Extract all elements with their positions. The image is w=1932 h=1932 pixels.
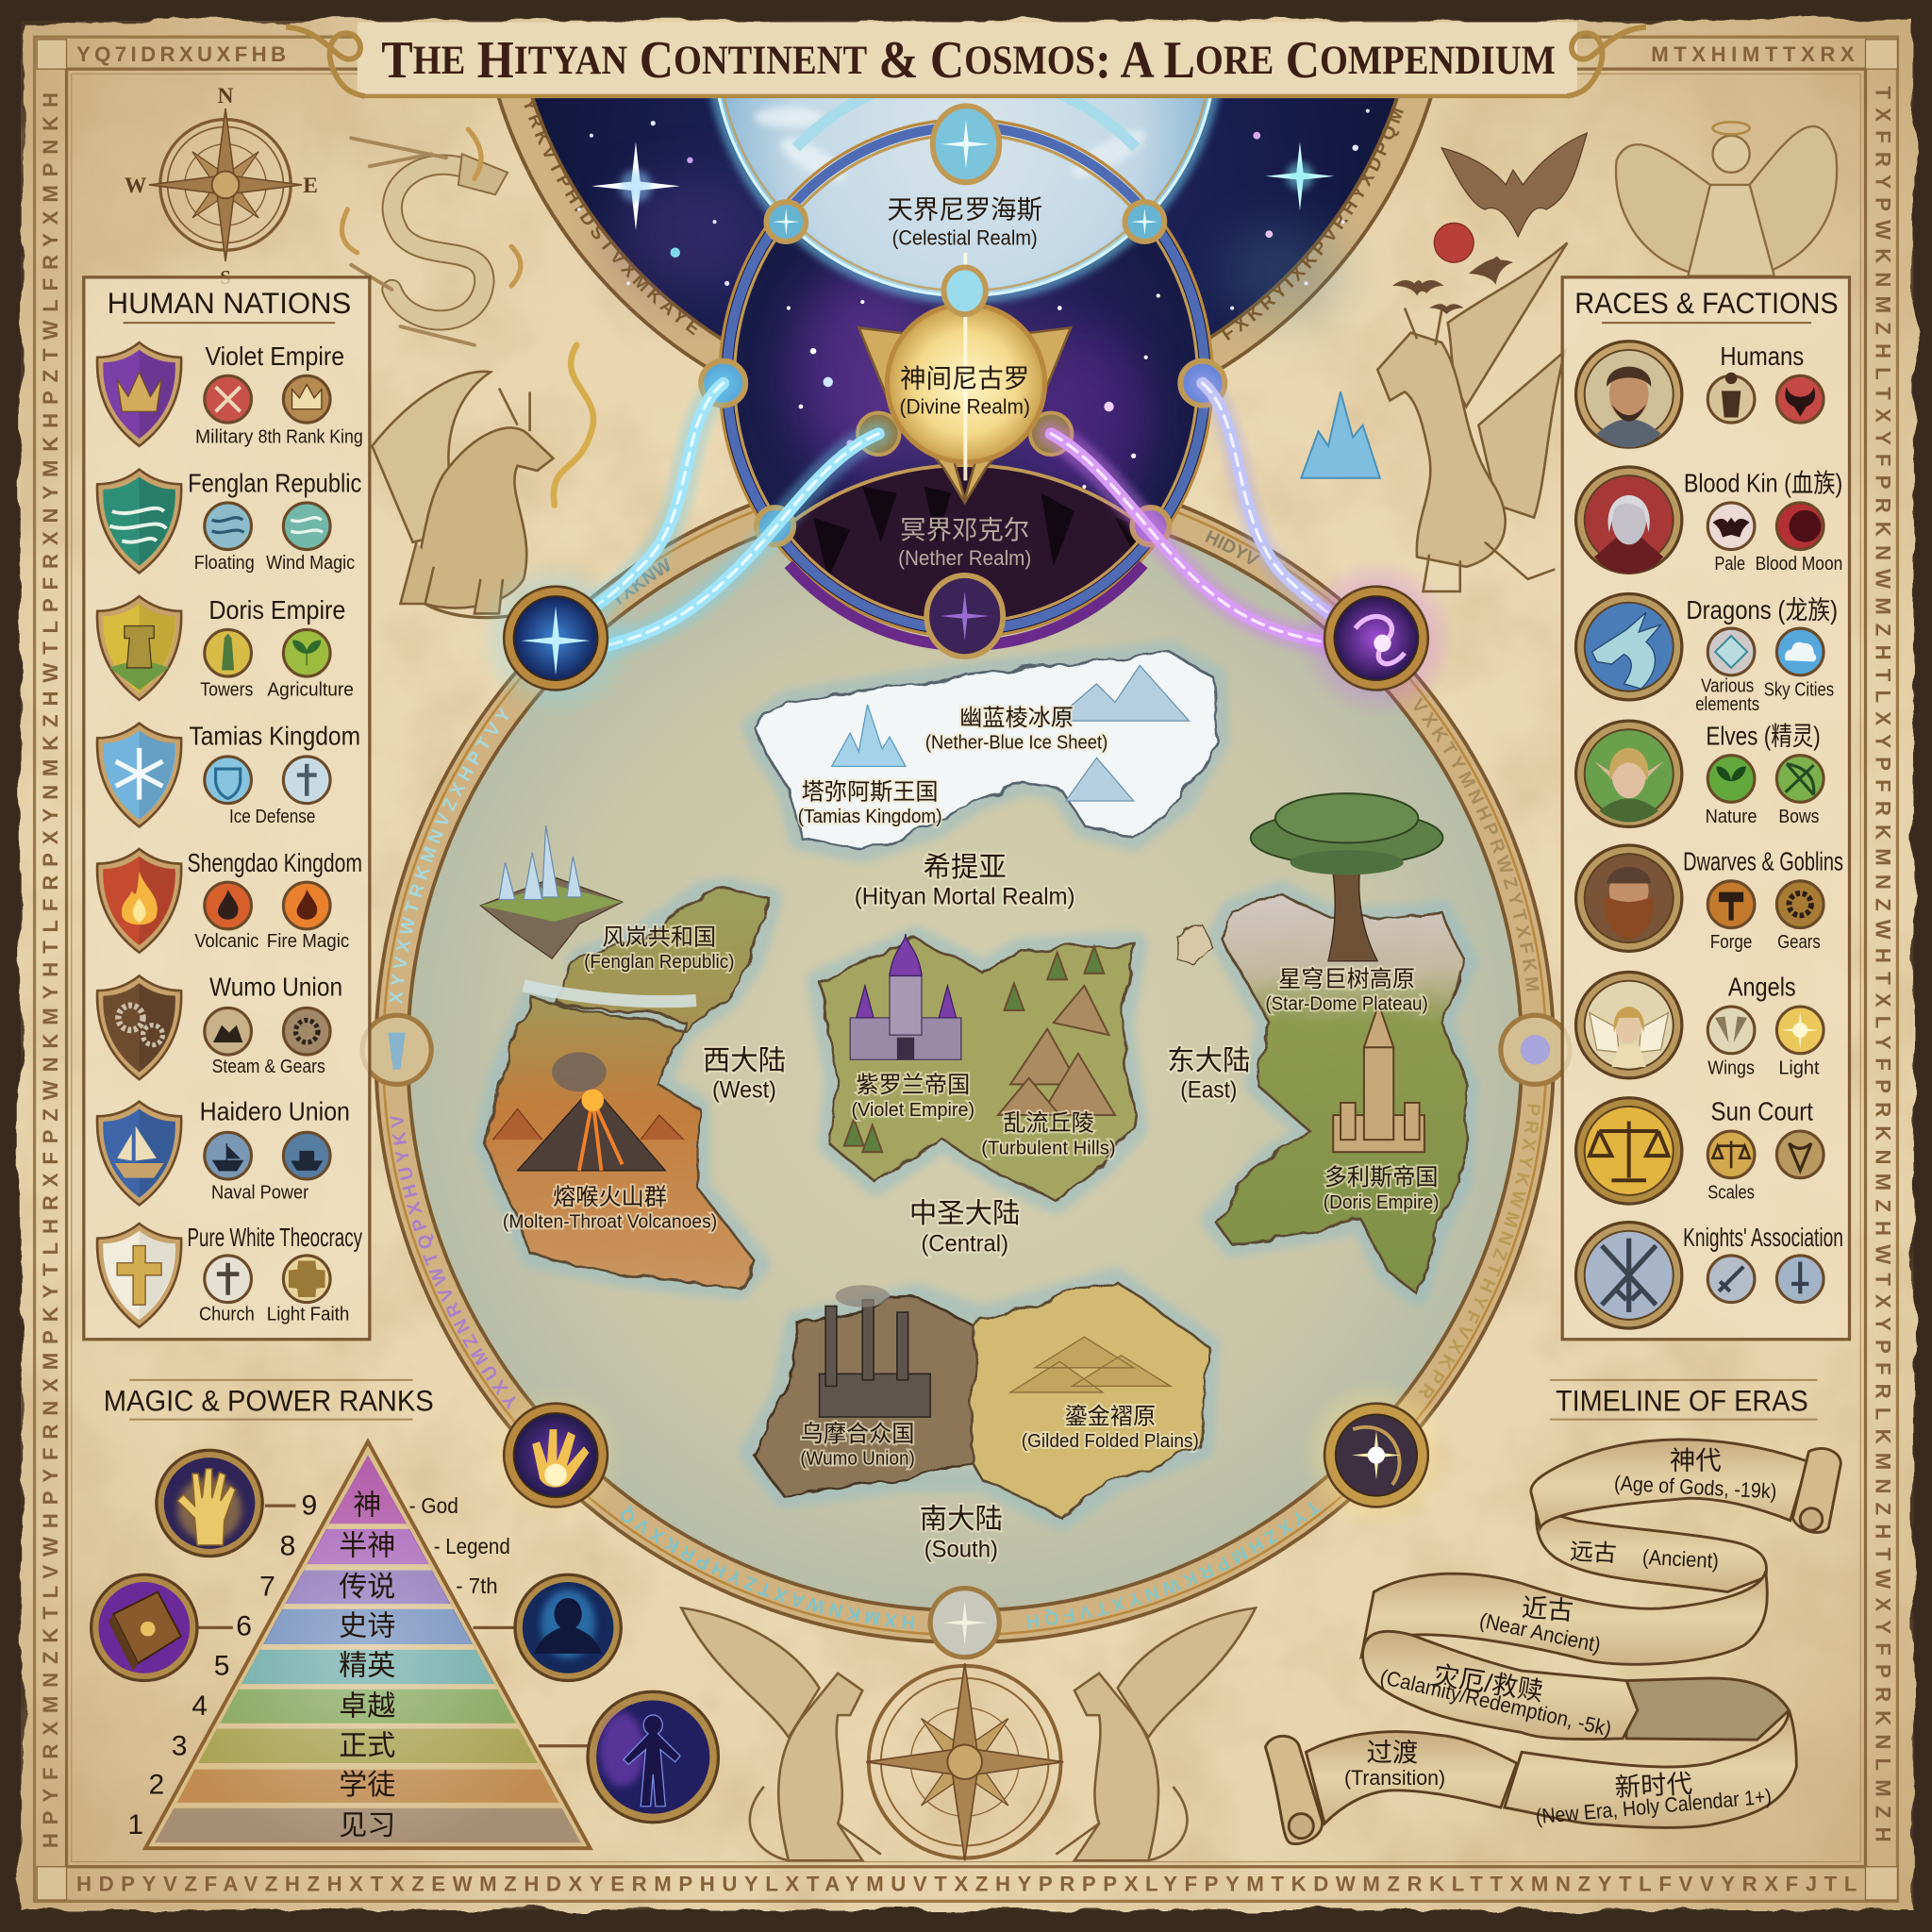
rank numbers and side notes: 4 xyxy=(192,1690,208,1722)
oval gold and blue ring xyxy=(720,74,1212,645)
nation: shengdao kingdom xyxy=(97,848,362,953)
timeline era labels: 新时代 xyxy=(1614,1769,1693,1802)
realm labels xyxy=(887,195,1042,570)
map labels: (Violet Empire) xyxy=(852,1100,974,1121)
race: sun court xyxy=(1576,1097,1824,1204)
panel: human nations xyxy=(84,277,370,1340)
outer rune border frame: YQ7IDRXUXFHB xyxy=(76,42,286,66)
main mortal realm circle with rune ring: VXKTYMNHPRWZYTXFKM xyxy=(1413,697,1540,991)
orb: flaming hand lower left xyxy=(484,1384,627,1526)
heading: timeline of eras: TIMELINE OF ERAS xyxy=(1556,1385,1808,1418)
compass rose top-left: E xyxy=(303,174,318,198)
nation: doris empire: Agriculture xyxy=(267,679,354,700)
timeline era labels: (New Era, Holy Calendar 1+) xyxy=(1535,1784,1773,1828)
rank numbers and side notes xyxy=(127,1491,589,1840)
race: blood kin: Blood Kin (血族) xyxy=(1684,468,1842,498)
cosmos disc with rune ring xyxy=(496,98,1432,370)
nation: shengdao kingdom: Fire Magic xyxy=(267,931,349,952)
cosmos disc with rune ring: FXKRYIXKPVRHYXDPQM xyxy=(1223,107,1404,341)
rank numbers and side notes: - 7th xyxy=(456,1574,498,1598)
medallion: divine hand xyxy=(157,1450,262,1557)
race: blood kin: Blood Moon xyxy=(1756,554,1842,575)
rank numbers and side notes: 2 xyxy=(149,1770,164,1801)
continent: northern ice sheet xyxy=(754,653,1217,850)
continent: eastern lands xyxy=(1176,893,1466,1293)
nether realm basin xyxy=(791,464,1140,621)
ring junction medallions xyxy=(701,106,1224,657)
orb: golden burst lower right xyxy=(1300,1379,1453,1532)
continent: central lands xyxy=(820,939,1135,1201)
map labels: 紫罗兰帝国 xyxy=(856,1073,970,1098)
timeline era labels: (Age of Gods, -19k) xyxy=(1613,1471,1777,1503)
nation: fenglan republic: Wind Magic xyxy=(266,553,355,574)
rank numbers and side notes: 7 xyxy=(259,1571,275,1602)
winged dragon sketch right xyxy=(1377,242,1567,591)
rune ring medallion south xyxy=(930,1589,999,1657)
rune ring medallion east xyxy=(1501,1015,1570,1084)
map labels: 西大陆 xyxy=(703,1045,786,1076)
heading: magic and power ranks: MAGIC & POWER RANKS xyxy=(104,1385,434,1418)
race: blood kin xyxy=(1576,467,1842,575)
medallion: arcane tome xyxy=(92,1574,197,1681)
race: dragons: Dragons (龙族) xyxy=(1686,595,1838,625)
race: dwarves and goblins xyxy=(1576,845,1843,953)
map labels: 鎏金褶原 xyxy=(1064,1405,1156,1430)
race: elves: Elves (精灵) xyxy=(1706,721,1821,750)
map labels: (Central) xyxy=(921,1232,1008,1257)
magic rank pyramid: 卓越 xyxy=(339,1690,395,1722)
nation: wumo union: Wumo Union xyxy=(209,973,342,1002)
race: elves xyxy=(1576,721,1824,827)
golden flame wisp xyxy=(554,345,593,506)
red moon with bats xyxy=(1392,223,1513,314)
bottom compass rose xyxy=(866,1663,1063,1860)
map labels: (Wumo Union) xyxy=(800,1448,915,1469)
nation: doris empire xyxy=(97,595,354,700)
realm labels: (Celestial Realm) xyxy=(892,226,1038,250)
race: angels xyxy=(1576,973,1824,1078)
map labels: 星穹巨树高原 xyxy=(1278,967,1415,992)
realm labels: 神间尼古罗 xyxy=(900,363,1029,392)
energy stream: violet links xyxy=(1051,383,1349,643)
nation: wumo union: Steam & Gears xyxy=(212,1057,325,1077)
nation: fenglan republic xyxy=(97,468,361,574)
angel sketch xyxy=(1616,122,1837,276)
nation: pure white theocracy: Church xyxy=(199,1305,255,1325)
nation: fenglan republic: Floating xyxy=(194,553,255,574)
continent: wumo union xyxy=(752,1296,975,1496)
cosmic rings enclosing the three realms xyxy=(722,230,1210,633)
timeline era labels: (Near Ancient) xyxy=(1477,1608,1603,1657)
wumo factory xyxy=(820,1285,930,1417)
map labels: (South) xyxy=(924,1538,998,1563)
compass rose top-left: S xyxy=(220,266,231,289)
map labels xyxy=(503,706,1440,1563)
winged dragon sketch left xyxy=(372,372,553,618)
energy stream: cyan links xyxy=(576,383,878,647)
rank numbers and side notes: 9 xyxy=(301,1491,317,1522)
magic rank pyramid: 半神 xyxy=(339,1531,395,1562)
floating crystal island xyxy=(480,825,623,958)
realm labels: 天界尼罗海斯 xyxy=(887,195,1042,225)
race: humans: Humans xyxy=(1720,341,1804,371)
timeline era labels: 灾厄/救赎 xyxy=(1431,1660,1545,1707)
map labels: 风岚共和国 xyxy=(602,924,716,950)
medallion: awakened blue figure xyxy=(515,1574,621,1681)
map labels: 多利斯帝国 xyxy=(1324,1165,1439,1191)
timeline era labels: 神代 xyxy=(1670,1445,1722,1474)
doris tower xyxy=(1333,1004,1424,1152)
compass rose top-left: W xyxy=(125,174,147,198)
nation: shengdao kingdom: Shengdao Kingdom xyxy=(188,848,362,877)
continent: gilded folded plains xyxy=(969,1280,1208,1518)
rank numbers and side notes: 6 xyxy=(236,1611,252,1642)
rank numbers and side notes: 8 xyxy=(280,1531,295,1562)
map labels: (West) xyxy=(712,1077,776,1103)
race: dragons: Sky Cities xyxy=(1764,679,1834,700)
timeline era labels: 近古 xyxy=(1521,1592,1574,1625)
heading: races and factions: RACES & FACTIONS xyxy=(1574,287,1839,320)
orb: star gate upper left xyxy=(475,558,636,718)
map labels: (Turbulent Hills) xyxy=(981,1138,1116,1158)
map labels: (East) xyxy=(1180,1077,1237,1103)
main mortal realm circle with rune ring: HXMKNWAXTZYHPRKXVQ xyxy=(621,1505,915,1629)
outer rune border frame: HPYFRXMNZKTLVWHPYFRNXMPKYTLHRXFPZWNKMYHTLFRPXYNMKZHWTLPFRXNYMKHPZTWLFRYXMPNKH xyxy=(39,92,62,1848)
celestial realm sky dome xyxy=(707,98,1223,308)
race: dwarves and goblins: Dwarves & Goblins xyxy=(1683,846,1843,875)
outer rune border frame: TXFRYPWKNMZHLTXYFPRKNWMZHTLXYPFRKMNZWHTXLYFPRKNMZHWTXYPFRLKMNZHTWXYFPRKNLMZH xyxy=(1871,86,1894,1842)
race: sun court: Scales xyxy=(1707,1182,1755,1203)
magic rank pyramid: 见习 xyxy=(339,1810,395,1841)
realm labels: (Nether Realm) xyxy=(898,546,1031,570)
outer rune border frame: HDPYVZFAVZHZHXTXZEWMZHDXYERMPHUYLXTAYMUVTXZHYPRPPXLYFPYMTKDWMZRKLTTXMNZYTLFVVYRXFJTL xyxy=(76,1873,1857,1896)
map labels: 希提亚 xyxy=(924,852,1007,883)
cosmos disc with rune ring: YRKVTPHIDSTVXMKAYE xyxy=(525,98,700,336)
nation: pure white theocracy: Light Faith xyxy=(267,1305,349,1325)
race: dragons: Various xyxy=(1701,676,1754,697)
rank numbers and side notes: - Legend xyxy=(434,1534,510,1558)
heading: human nations: HUMAN NATIONS xyxy=(108,287,351,320)
nation: fenglan republic: Fenglan Republic xyxy=(188,468,361,498)
divine realm sun emblem xyxy=(858,253,1072,503)
nation: violet empire: Military xyxy=(195,427,254,448)
main mortal realm circle with rune ring: TYXZHMPRKWNYXTVFQH xyxy=(1026,1502,1321,1628)
race: humans xyxy=(1576,341,1824,447)
nation: violet empire xyxy=(97,341,363,448)
map labels: (Tamias Kingdom) xyxy=(798,807,942,827)
map labels: (Star-Dome Plateau) xyxy=(1265,993,1428,1014)
nation: shengdao kingdom: Volcanic xyxy=(194,931,258,952)
race: dragons: elements xyxy=(1695,694,1759,715)
timeline era labels: 过渡 xyxy=(1367,1738,1418,1767)
main mortal realm circle with rune ring: XYVXWTRKMNVZXHPTVY xyxy=(389,707,509,1004)
race: knights association xyxy=(1576,1223,1843,1328)
star-dome great tree xyxy=(1251,793,1442,961)
nation: wumo union xyxy=(97,973,342,1079)
realm labels: 冥界邓克尔 xyxy=(900,515,1029,544)
map labels: 幽蓝棱冰原 xyxy=(959,706,1074,731)
nation: pure white theocracy xyxy=(97,1223,362,1327)
map labels: 塔弥阿斯王国 xyxy=(802,779,939,805)
rank numbers and side notes: 5 xyxy=(214,1650,229,1681)
main mortal realm circle with rune ring xyxy=(375,504,1555,1643)
outer rune border frame: MTXHIMTTXRX xyxy=(1651,42,1855,66)
volcano xyxy=(492,1052,684,1171)
serpentine dragon sketch xyxy=(341,129,521,345)
map labels: (Fenglan Republic) xyxy=(584,952,734,973)
map labels: (Doris Empire) xyxy=(1324,1192,1440,1213)
magic rank pyramid: 神 xyxy=(353,1491,381,1522)
nation: tamias kingdom xyxy=(97,721,360,827)
bottom left dragon sketch xyxy=(681,1607,881,1860)
timeline era labels xyxy=(1344,1445,1777,1828)
magic rank pyramid xyxy=(145,1441,591,1848)
realm labels: (Divine Realm) xyxy=(899,395,1030,419)
race: elves: Nature xyxy=(1706,807,1757,827)
medallion: ascended violet figure xyxy=(588,1691,718,1823)
race: blood kin: Pale xyxy=(1714,554,1745,575)
main mortal realm circle with rune ring: PRXYKWMNZTHYFVXKPR xyxy=(1419,1104,1541,1398)
race: dwarves and goblins: Forge xyxy=(1710,932,1752,953)
nation: doris empire: Towers xyxy=(200,679,253,700)
nation: haidero union: Naval Power xyxy=(211,1182,308,1203)
race: dwarves and goblins: Gears xyxy=(1777,932,1821,953)
magic rank pyramid: 传说 xyxy=(339,1572,395,1603)
magic rank pyramid: 精英 xyxy=(339,1650,395,1681)
timeline scroll ribbon xyxy=(1265,1440,1840,1844)
race: knights association: Knights' Association xyxy=(1683,1223,1843,1252)
rank numbers and side notes: - God xyxy=(409,1493,458,1518)
turbulent hills xyxy=(844,946,1115,1152)
nation: tamias kingdom: Ice Defense xyxy=(229,807,315,827)
map labels: 熔喉火山群 xyxy=(553,1185,667,1210)
map labels: 南大陆 xyxy=(920,1504,1003,1535)
title plaque: THE HITYAN CONTINENT & COSMOS: A LORE COMPENDIUM xyxy=(381,31,1556,90)
nation: doris empire: Doris Empire xyxy=(208,595,345,625)
timeline era labels: (Calamity/Redemption, -5k) xyxy=(1378,1665,1614,1740)
map labels: 乌摩合众国 xyxy=(801,1422,914,1447)
main mortal realm circle with rune ring: YXKNW xyxy=(615,558,670,605)
rank numbers and side notes: 3 xyxy=(172,1730,187,1761)
map labels: (Molten-Throat Volcanoes) xyxy=(503,1212,717,1233)
compass rose top-left: N xyxy=(218,84,234,108)
race: elves: Bows xyxy=(1778,807,1819,827)
nation: haidero union xyxy=(97,1097,350,1205)
continent: western lands xyxy=(486,890,770,1288)
large bat sketch xyxy=(1441,133,1587,237)
violet castle xyxy=(850,934,961,1059)
magic rank pyramid: 史诗 xyxy=(339,1611,395,1642)
map labels: 东大陆 xyxy=(1167,1045,1250,1076)
timeline era labels: (Transition) xyxy=(1344,1766,1445,1790)
race: angels: Light xyxy=(1778,1058,1820,1078)
blue crystal flame xyxy=(1301,391,1380,478)
nation: haidero union: Haidero Union xyxy=(200,1097,350,1126)
land halos xyxy=(486,653,1466,1518)
bottom right dragon sketch xyxy=(1056,1607,1256,1860)
race: angels: Wings xyxy=(1707,1058,1755,1078)
rank numbers and side notes: 1 xyxy=(127,1809,143,1840)
nation: tamias kingdom: Tamias Kingdom xyxy=(189,721,360,750)
orb: violet vortex upper right xyxy=(1296,558,1457,718)
panel: races and factions xyxy=(1562,277,1849,1340)
timeline era labels: (Ancient) xyxy=(1641,1545,1720,1573)
timeline era labels: 远古 xyxy=(1569,1539,1617,1567)
race: sun court: Sun Court xyxy=(1711,1097,1813,1126)
title plaque xyxy=(286,23,1646,96)
race: dragons xyxy=(1576,594,1838,715)
magic rank pyramid: 学徒 xyxy=(339,1770,395,1801)
race: angels: Angels xyxy=(1728,973,1796,1002)
nation: violet empire: Violet Empire xyxy=(205,341,344,371)
map labels: (Gilded Folded Plains) xyxy=(1022,1431,1199,1452)
map labels: 乱流丘陵 xyxy=(1003,1111,1094,1137)
rune ring medallion west xyxy=(362,1015,431,1084)
nation: violet empire: 8th Rank King xyxy=(258,427,363,448)
nation: pure white theocracy: Pure White Theocracy xyxy=(188,1223,362,1252)
compass rose top-left xyxy=(125,84,318,289)
main mortal realm circle with rune ring: HIDYV xyxy=(1205,530,1260,564)
main mortal realm circle with rune ring: YXUMZNRVWTQPXHUYKV xyxy=(391,1116,516,1409)
map labels: (Nether-Blue Ice Sheet) xyxy=(925,733,1108,754)
map labels: (Hityan Mortal Realm) xyxy=(855,884,1075,909)
map labels: 中圣大陆 xyxy=(909,1198,1020,1229)
magic rank pyramid: 正式 xyxy=(339,1730,395,1761)
